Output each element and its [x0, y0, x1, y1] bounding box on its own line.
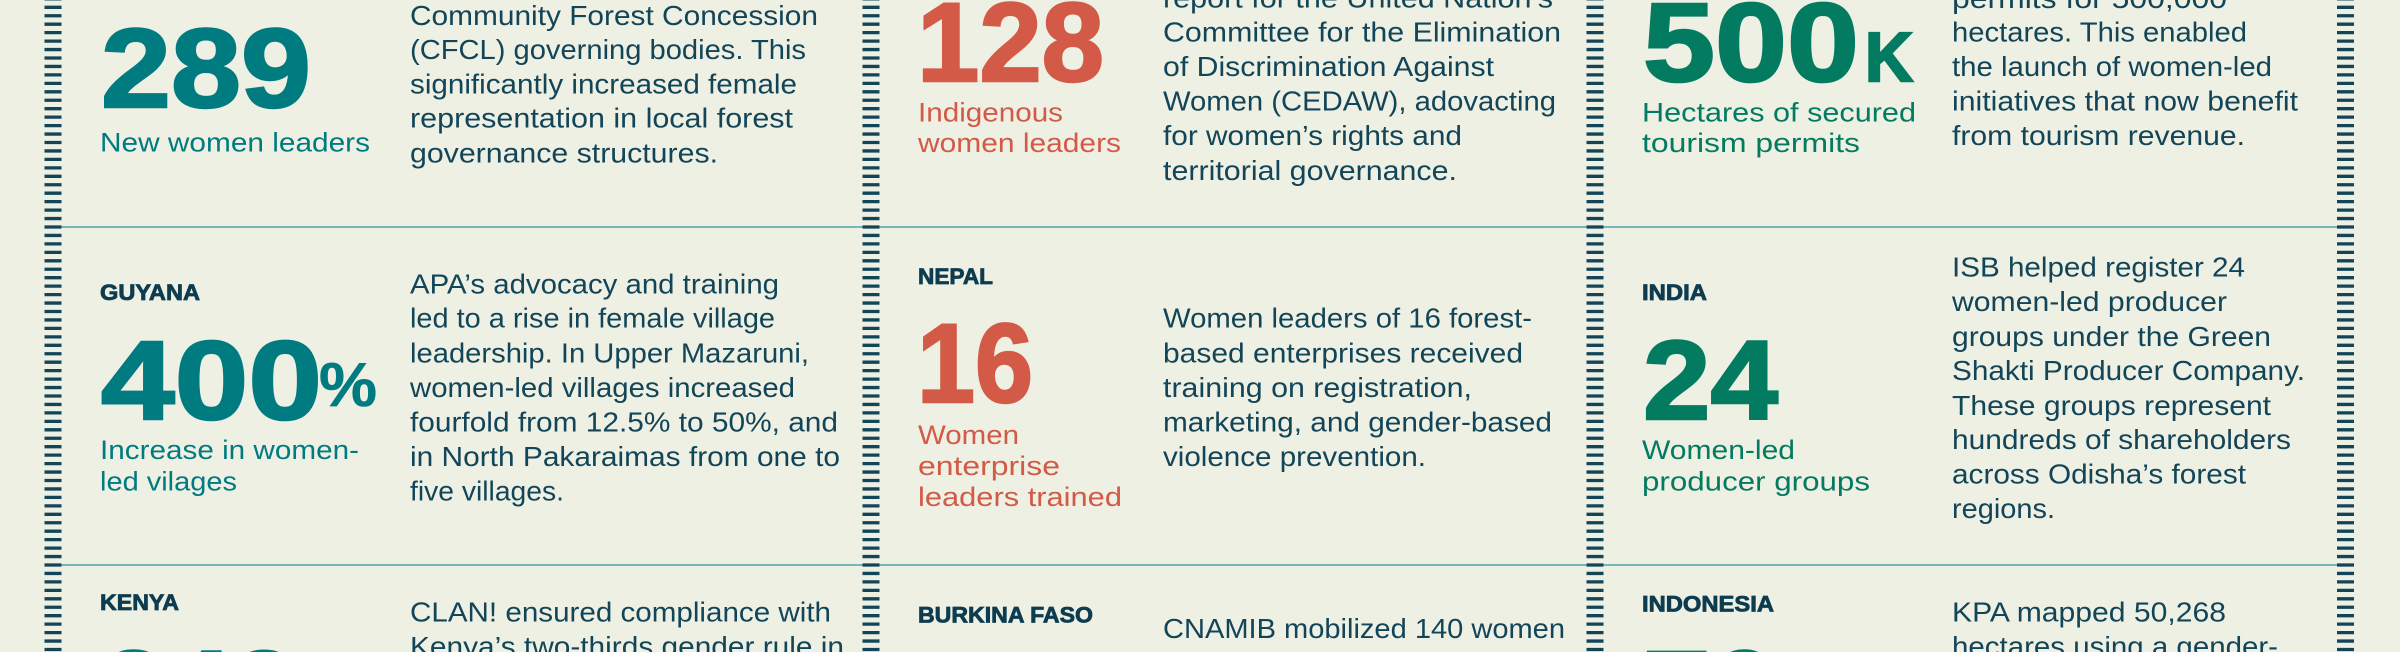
body text: (CFCL) governing bodies. This	[410, 34, 806, 65]
body text: significantly increased female	[410, 68, 797, 100]
stat label: Hectares of secured	[1642, 98, 1916, 128]
body text: Community Forest Concession	[410, 0, 818, 31]
stat label: Increase in women-	[100, 435, 359, 465]
stat: 500K: K	[1865, 18, 1913, 96]
stat: 24: 24	[1643, 318, 1778, 443]
body text	[1951, 252, 2305, 524]
body text: groups under the Green	[1952, 321, 2271, 352]
body text: Shakti Producer Company.	[1952, 355, 2305, 386]
panel: India 24	[1642, 252, 2305, 524]
body text: territorial governance.	[1163, 155, 1457, 186]
stat label	[100, 435, 359, 497]
body text: regions.	[1952, 493, 2055, 524]
body text	[1952, 0, 2298, 151]
body text: violence prevention.	[1163, 441, 1426, 472]
body text: hectares. This enabled	[1952, 17, 2247, 48]
body text: representation in local forest	[410, 103, 793, 134]
stat label: led vilages	[100, 467, 237, 497]
panel: 128 Indigenous women leaders	[917, 0, 1561, 186]
body text: women-led villages increased	[409, 372, 795, 403]
body text: marketing, and gender-based	[1163, 407, 1552, 438]
stat label: women leaders	[917, 128, 1121, 158]
panel: Kenya	[100, 590, 844, 652]
body text	[1952, 597, 2278, 652]
body text: in North Pakaraimas from one to	[410, 441, 840, 472]
body text: women-led producer	[1951, 286, 2227, 317]
country heading: GUYANA	[100, 280, 200, 305]
stat: 500K	[1643, 0, 1913, 105]
stat label	[918, 420, 1122, 512]
body text: APA’s advocacy and training	[410, 268, 779, 300]
body text: initiatives that now benefit	[1952, 86, 2298, 117]
stat label	[1642, 435, 1870, 497]
stat label	[1642, 98, 1916, 158]
stat: 400%: 400	[101, 318, 322, 443]
body text	[410, 597, 844, 652]
body text: training on registration,	[1163, 372, 1472, 403]
body text: for women’s rights and	[1163, 120, 1462, 151]
stat: 400%: %	[319, 351, 377, 420]
stat label	[917, 98, 1121, 158]
body text: led to a rise in female village	[410, 303, 775, 334]
country heading: INDONESIA	[1642, 592, 1774, 617]
body text: Committee for the Elimination	[1163, 17, 1561, 48]
panel: 500K hectares of tourism permits	[1642, 0, 2298, 158]
stat label: producer groups	[1642, 467, 1870, 497]
stat label: Women	[918, 420, 1019, 450]
body text: fourfold from 12.5% to 50%, and	[410, 407, 838, 438]
country heading: NEPAL	[918, 264, 993, 289]
body text: across Odisha’s forest	[1952, 459, 2246, 490]
body text: from tourism revenue.	[1952, 120, 2245, 151]
body text	[409, 268, 840, 507]
body text: KPA mapped 50,268	[1952, 597, 2226, 628]
body text	[1163, 0, 1561, 186]
body text: governance structures.	[410, 137, 718, 168]
stat: 289: 289	[101, 6, 311, 131]
body text: hundreds of shareholders	[1952, 424, 2291, 455]
stat label: leaders trained	[918, 482, 1122, 512]
body text	[1163, 303, 1552, 472]
body text: Women (CEDAW), adovacting	[1163, 86, 1556, 117]
country heading: BURKINA FASO	[918, 602, 1093, 628]
stat label: Women-led	[1642, 435, 1795, 465]
body text: of Discrimination Against	[1163, 51, 1494, 82]
panel: Guyana 400%	[100, 268, 840, 507]
body text: CNAMIB mobilized 140 women	[1163, 613, 1565, 644]
panel: Burkina Faso	[918, 602, 1565, 644]
stat label: enterprise	[918, 451, 1060, 481]
country heading: INDIA	[1642, 280, 1707, 305]
body text: five villages.	[410, 476, 564, 507]
panel: Indonesia	[1642, 592, 2278, 652]
body text: ISB helped register 24	[1952, 252, 2245, 283]
body text: leadership. In Upper Mazaruni,	[410, 338, 809, 369]
stat label: Indigenous	[918, 98, 1063, 128]
stat label: tourism permits	[1642, 128, 1860, 158]
body text: Women leaders of 16 forest-	[1163, 303, 1532, 334]
body text	[410, 0, 818, 168]
stat: 16: 16	[917, 301, 1033, 426]
stat: 400%	[101, 318, 377, 443]
body text: CLAN! ensured compliance with	[410, 597, 831, 628]
panel: 289 new women leaders	[100, 0, 818, 168]
body text: based enterprises received	[1163, 338, 1523, 369]
panel: Nepal 16	[917, 264, 1552, 512]
stat label: New women leaders	[100, 128, 370, 158]
body text: These groups represent	[1952, 390, 2271, 421]
country heading: KENYA	[100, 590, 179, 615]
body text: the launch of women-led	[1952, 51, 2272, 82]
